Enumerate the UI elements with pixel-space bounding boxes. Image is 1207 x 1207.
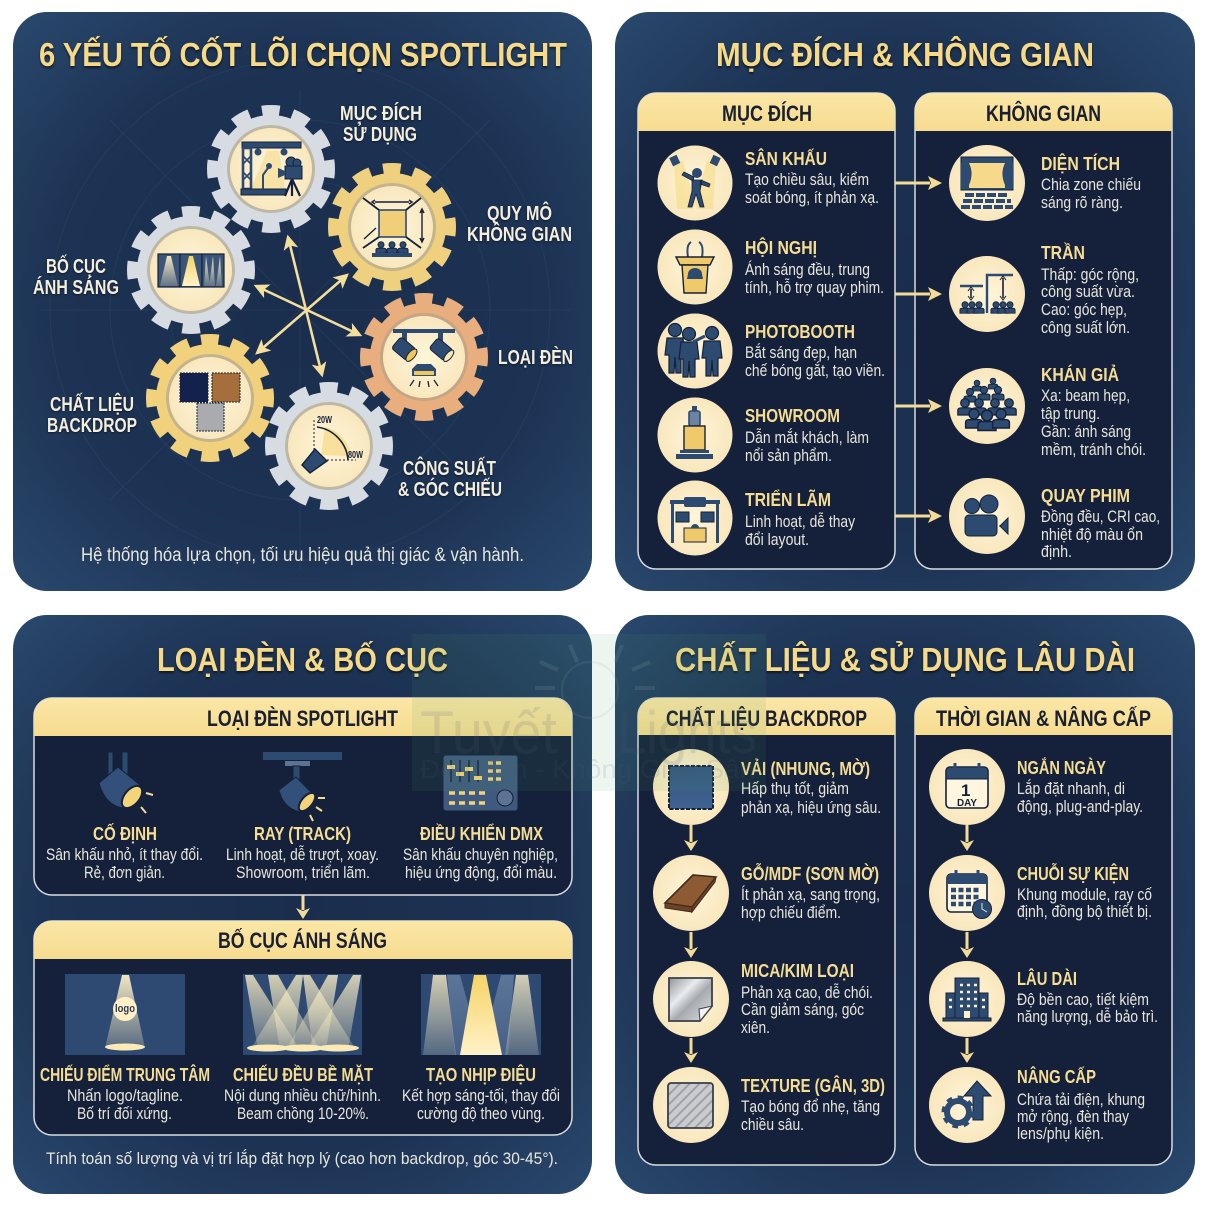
item: nâng cấp <box>929 1066 1145 1143</box>
gear: bố cục ánh sáng <box>134 213 248 327</box>
gear labels: MỤC ĐÍCH <box>340 102 422 125</box>
box: thời gian và nâng cấp <box>915 698 1172 1165</box>
gear: chất liệu backdrop <box>153 341 267 455</box>
gear labels: CHẤT LIỆU <box>50 392 134 416</box>
watermark: Lights <box>617 699 757 766</box>
item: tạo nhịp điệu: cường độ theo vùng. <box>417 1105 545 1123</box>
item: khán giả: tập trung. <box>1041 405 1100 423</box>
item: chiếu điểm trung tâm: Nhấn logo/tagline. <box>67 1087 183 1105</box>
panel: mục đích và không gian <box>615 12 1195 591</box>
item: quay phim: QUAY PHIM <box>1041 485 1130 506</box>
icon: wattage and beam angle: 80W <box>348 449 363 461</box>
gear labels <box>33 102 573 501</box>
item: trần: Thấp: góc rộng, <box>1041 266 1139 284</box>
item: khán giả: Xa: beam hẹp, <box>1041 387 1130 405</box>
item: lâu dài <box>929 961 1158 1037</box>
item: ngắn ngày: DAY <box>957 798 977 809</box>
item: tạo nhịp điệu: TẠO NHỊP ĐIỆU <box>426 1064 536 1085</box>
item: sân khấu: Tạo chiều sâu, kiểm <box>745 171 869 189</box>
item: chiếu đều bề mặt <box>224 974 381 1123</box>
item: gỗ mdf: Ít phản xạ, sang trọng, <box>741 885 880 904</box>
header: MỤC ĐÍCH <box>722 101 812 126</box>
item: cố định: CỐ ĐỊNH <box>93 823 157 844</box>
gear labels: SỬ DỤNG <box>343 122 417 146</box>
icon: three lighting layouts <box>158 254 224 287</box>
item: photobooth: PHOTOBOOTH <box>745 321 855 342</box>
item: ray: Linh hoạt, dễ trượt, xoay. <box>226 845 379 864</box>
item: cố định: Sân khấu nhỏ, ít thay đổi. <box>46 846 203 864</box>
connector arrows <box>256 237 360 375</box>
title: CHẤT LIỆU & SỬ DỤNG LÂU DÀI <box>675 641 1135 678</box>
item: trần: Cao: góc hẹp, <box>1041 301 1127 319</box>
item: hội nghị: Ánh sáng đều, trung <box>745 260 870 279</box>
item: ngắn ngày: NGẮN NGÀY <box>1017 757 1107 778</box>
item: điều khiển dmx: Sân khấu chuyên nghiệp, <box>403 846 558 864</box>
item: ray: RAY (TRACK) <box>254 823 351 844</box>
item: ray: Showroom, triển lãm. <box>236 864 370 882</box>
item: khán giả <box>949 364 1146 459</box>
item: gỗ mdf <box>653 855 880 931</box>
item: khán giả: mềm, tránh chói. <box>1041 441 1146 459</box>
item: khán giả: Gần: ánh sáng <box>1041 423 1131 441</box>
header: CHẤT LIỆU BACKDROP <box>666 706 867 731</box>
item: chuỗi sự kiện: Khung module, ray cố <box>1017 886 1152 904</box>
item: trần: công suất lớn. <box>1041 319 1130 337</box>
arrows: material flow <box>684 825 698 1063</box>
item: điều khiển dmx: hiệu ứng động, đổi màu. <box>405 864 557 882</box>
item: showroom: nổi sản phẩm. <box>745 447 832 465</box>
item: cố định <box>46 752 203 882</box>
item: ngắn ngày <box>929 749 1143 825</box>
item: quay phim: định. <box>1041 543 1072 561</box>
item: texture: Tạo bóng đổ nhẹ, tăng <box>741 1098 880 1116</box>
item: lâu dài: LÂU DÀI <box>1017 968 1077 989</box>
item: gỗ mdf: GỖ/MDF (SƠN MỜ) <box>741 863 879 884</box>
item: chiếu đều bề mặt: CHIẾU ĐỀU BỀ MẶT <box>233 1064 374 1085</box>
item: triển lãm: đổi layout. <box>745 531 809 549</box>
item: trần <box>949 242 1139 337</box>
item: nâng cấp: mở rộng, đèn thay <box>1017 1108 1130 1126</box>
item: diện tích: sáng rõ ràng. <box>1041 194 1123 212</box>
icon: material swatches <box>180 373 240 431</box>
image: rhythm lighting <box>421 974 541 1055</box>
watermark <box>412 634 766 791</box>
panel: loại đèn và bố cục <box>13 615 592 1194</box>
arrow: down <box>296 895 310 919</box>
item: mica kim loại: xiên. <box>741 1019 770 1037</box>
item: chiếu đều bề mặt: Beam chồng 10-20%. <box>237 1105 369 1123</box>
item: showroom: SHOWROOM <box>745 405 840 426</box>
item: vải: VẢI (NHUNG, MỜ) <box>741 758 870 779</box>
item: nâng cấp: NÂNG CẤP <box>1017 1066 1096 1087</box>
icon: wattage and beam angle <box>302 414 363 473</box>
box: bố cục ánh sáng <box>34 921 572 1135</box>
item: hội nghị: tính, hỗ trợ quay phim. <box>745 278 884 297</box>
item: ngắn ngày: Lắp đặt nhanh, di <box>1017 779 1125 798</box>
title: LOẠI ĐÈN & BỐ CỤC <box>157 640 448 678</box>
item: texture: chiều sâu. <box>741 1116 804 1134</box>
arrows: time flow <box>960 825 974 1063</box>
icon: fixed spotlight <box>99 752 153 813</box>
box: mục đích <box>638 93 895 569</box>
item: triển lãm <box>658 480 856 556</box>
gear labels: ÁNH SÁNG <box>33 276 119 299</box>
icon: track spotlight <box>263 752 342 821</box>
gear labels: BACKDROP <box>47 415 137 437</box>
item: gỗ mdf: hợp chiếu điểm. <box>741 904 841 922</box>
header: THỜI GIAN & NÂNG CẤP <box>936 706 1151 731</box>
header: KHÔNG GIAN <box>986 101 1101 126</box>
item: sân khấu: soát bóng, ít phản xạ. <box>745 189 879 207</box>
image: center spotlight: logo <box>115 1003 135 1015</box>
item: hội nghị: HỘI NGHỊ <box>745 237 817 258</box>
icon: room dimensions <box>363 198 424 257</box>
panel: chất liệu và sử dụng lâu dài <box>615 615 1195 1194</box>
icon: wattage and beam angle: 20W <box>317 414 332 426</box>
title: 6 YẾU TỐ CỐT LÕI CHỌN SPOTLIGHT <box>39 35 567 73</box>
item: ngắn ngày: động, plug-and-play. <box>1017 798 1143 816</box>
watermark: Đèn Sân - Không Gian Sân <box>420 754 755 784</box>
item: sân khấu <box>658 146 879 220</box>
item: chiếu điểm trung tâm: CHIẾU ĐIỂM TRUNG TÂM <box>40 1064 210 1085</box>
item: chiếu điểm trung tâm: Bố trí đối xứng. <box>77 1105 172 1123</box>
item: mica kim loại: Cần giảm sáng, góc <box>741 1001 864 1019</box>
item: diện tích <box>949 145 1141 221</box>
gear: loại đèn <box>367 300 481 414</box>
icon: spotlight fixtures <box>391 329 456 387</box>
item: nâng cấp: lens/phụ kiện. <box>1017 1125 1104 1143</box>
icon: stage truss and camera <box>241 142 302 196</box>
item: chiếu đều bề mặt: Nội dung nhiều chữ/hình. <box>224 1087 381 1105</box>
item: vải <box>653 749 881 825</box>
arrows: mục đích to không gian <box>895 176 942 523</box>
item: photobooth: Bắt sáng đẹp, hạn <box>745 343 857 362</box>
item: tạo nhịp điệu: Kết hợp sáng-tối, thay đổi <box>402 1087 560 1105</box>
item: trần: công suất vừa. <box>1041 283 1135 301</box>
item: showroom: Dẫn mắt khách, làm <box>745 428 869 447</box>
gear labels: BỐ CỤC <box>46 254 106 278</box>
item: vải: Hấp thụ tốt, giảm <box>741 780 849 798</box>
item: texture <box>653 1067 885 1143</box>
item: triển lãm: TRIỂN LÃM <box>745 489 831 510</box>
item: quay phim <box>949 478 1160 561</box>
item: lâu dài: năng lượng, dễ bảo trì. <box>1017 1007 1158 1026</box>
watermark: Tuyết <box>420 699 557 766</box>
box: loại đèn spotlight <box>34 698 572 895</box>
footer note: Tính toán số lượng và vị trí lắp đặt hợp lý (cao hơn backdrop, góc 30-45°). <box>46 1149 558 1168</box>
item: lâu dài: Độ bền cao, tiết kiệm <box>1017 991 1149 1009</box>
item: ngắn ngày: 1 <box>961 781 970 800</box>
gear: công suất và góc chiếu <box>272 389 386 503</box>
item: điều khiển dmx: ĐIỀU KHIỂN DMX <box>420 823 544 844</box>
item: vải: phản xạ, hiệu ứng sâu. <box>741 799 881 817</box>
gear: quy mô không gian <box>335 170 449 284</box>
gear: mục đích sử dụng <box>214 112 328 226</box>
item: diện tích: DIỆN TÍCH <box>1041 153 1120 174</box>
header: BỐ CỤC ÁNH SÁNG <box>218 927 387 953</box>
item: chuỗi sự kiện: định, đồng bộ thiết bị. <box>1017 903 1152 921</box>
item: hội nghị <box>658 230 884 304</box>
item: ray <box>226 752 379 882</box>
item: showroom <box>658 398 869 472</box>
image: wash lighting <box>243 974 362 1055</box>
item: mica kim loại <box>653 960 873 1037</box>
item: quay phim: nhiệt độ màu ổn <box>1041 526 1143 544</box>
item: quay phim: Đồng đều, CRI cao, <box>1041 508 1160 526</box>
item: mica kim loại: MICA/KIM LOẠI <box>741 960 854 981</box>
item: chiếu điểm trung tâm <box>40 974 210 1123</box>
gear labels: LOẠI ĐÈN <box>498 346 573 369</box>
title: MỤC ĐÍCH & KHÔNG GIAN <box>716 35 1094 73</box>
item: photobooth <box>658 314 885 388</box>
gear labels: CÔNG SUẤT <box>403 456 496 480</box>
item: khán giả: KHÁN GIẢ <box>1041 364 1119 385</box>
item: cố định: Rẻ, đơn giản. <box>84 864 165 882</box>
image: center spotlight <box>65 974 185 1055</box>
panel: 6 yếu tố cốt lõi <box>13 12 592 591</box>
box: chất liệu backdrop <box>638 698 895 1165</box>
item: diện tích: Chia zone chiếu <box>1041 176 1141 194</box>
item: photobooth: chế bóng gắt, tạo viền. <box>745 361 885 380</box>
item: trần: TRẦN <box>1041 242 1085 263</box>
header: LOẠI ĐÈN SPOTLIGHT <box>207 706 398 731</box>
box: không gian <box>915 93 1172 569</box>
icon: dmx console <box>443 755 518 811</box>
item: nâng cấp: Chứa tải điện, khung <box>1017 1091 1145 1109</box>
gear labels: QUY MÔ <box>487 201 552 225</box>
gear labels: KHÔNG GIAN <box>467 222 572 246</box>
item: điều khiển dmx <box>403 755 558 882</box>
item: chuỗi sự kiện: CHUỖI SỰ KIỆN <box>1017 863 1129 884</box>
item: mica kim loại: Phản xạ cao, dễ chói. <box>741 983 873 1002</box>
gear labels: & GÓC CHIẾU <box>398 477 502 501</box>
item: tạo nhịp điệu <box>402 974 560 1123</box>
footer note: Hệ thống hóa lựa chọn, tối ưu hiệu quả thị giác & vận hành. <box>81 545 524 566</box>
item: chuỗi sự kiện <box>929 855 1152 931</box>
item: sân khấu: SÂN KHẤU <box>745 148 827 169</box>
item: triển lãm: Linh hoạt, dễ thay <box>745 512 856 531</box>
item: texture: TEXTURE (GÂN, 3D) <box>741 1075 885 1096</box>
